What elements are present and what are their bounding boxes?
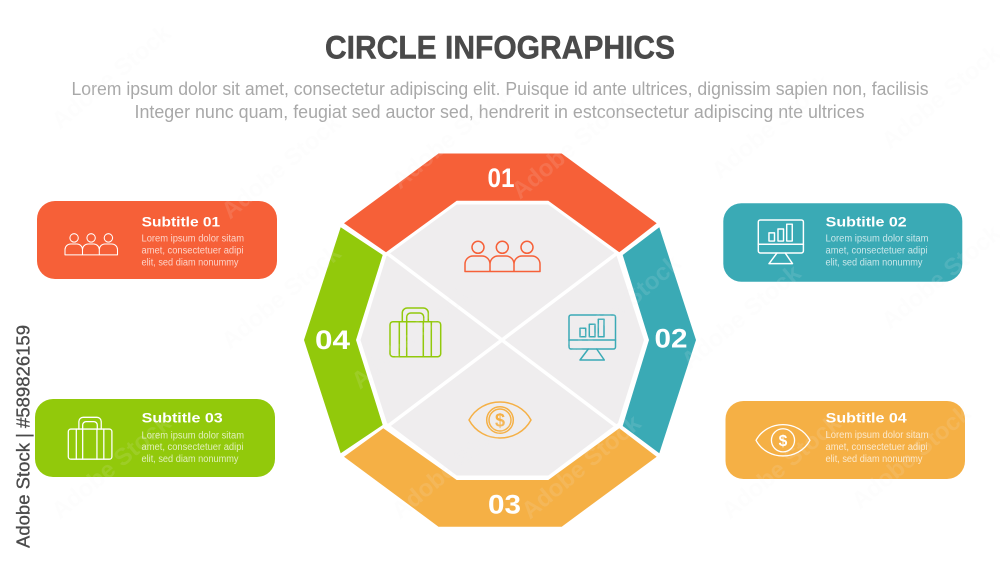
card text 03: Lorem ipsum dolor sitam — [142, 430, 244, 441]
segment 04: 04 — [315, 325, 350, 355]
card text 04: elit, sed diam nonummy — [826, 454, 922, 465]
stock watermarks: Adobe Stock — [677, 259, 807, 375]
stock watermarks: Adobe Stock — [847, 399, 977, 515]
icon: eye small: $ — [779, 433, 788, 450]
card: subtitle 01 — [37, 201, 277, 279]
icon: people — [465, 241, 540, 272]
segment 01 — [344, 154, 657, 252]
icon: eye with dollar — [469, 402, 531, 438]
title: CIRCLE INFOGRAPHICS — [325, 30, 675, 66]
card text 01: elit, sed diam nonummy — [142, 258, 238, 268]
stock watermarks: Adobe Stock — [507, 89, 637, 205]
stock id label: Adobe Stock | #589826159 — [14, 325, 34, 548]
stock watermarks: Adobe Stock — [217, 239, 347, 355]
card: subtitle 03 — [35, 399, 275, 477]
card text 02 — [826, 214, 928, 268]
card text 03 — [142, 411, 244, 465]
stock watermarks: Adobe Stock — [47, 19, 177, 135]
card text 02: amet, consectetuer adipi — [826, 246, 928, 256]
stock watermarks: Adobe Stock — [517, 409, 647, 525]
stock watermarks: Adobe Stock — [347, 279, 477, 395]
card text 03: elit, sed diam nonummy — [142, 454, 238, 465]
stock watermarks: Adobe Stock — [47, 409, 177, 525]
stock watermarks: Adobe Stock — [557, 249, 687, 365]
card: subtitle 02 — [723, 203, 962, 282]
card text 04: amet, consectetuer adipi — [826, 442, 928, 453]
center panel — [360, 204, 644, 476]
icon: eye with dollar: $ — [495, 410, 505, 430]
card text 03: amet, consectetuer adipi — [142, 442, 244, 453]
segment 03 — [344, 428, 657, 527]
card text 01 — [142, 214, 244, 268]
segment 02 — [623, 227, 696, 453]
card text 03: Subtitle 03 — [142, 411, 223, 426]
stock watermarks: Adobe Stock — [717, 409, 847, 525]
segment 04 — [304, 227, 383, 453]
stock watermarks: Adobe Stock — [707, 69, 837, 185]
icon: monitor — [569, 315, 616, 360]
card: subtitle 04 — [726, 401, 965, 479]
segment 02: 02 — [654, 324, 688, 354]
card text 02: Lorem ipsum dolor sitam — [826, 234, 928, 245]
card text 04: Subtitle 04 — [826, 411, 907, 426]
card text 02: Subtitle 02 — [826, 214, 907, 230]
icon: briefcase small — [68, 417, 112, 459]
icon: monitor small — [758, 220, 803, 264]
circle diagram — [304, 154, 696, 527]
intro text: Integer nunc quam, feugiat sed auctor sed, hendrerit in estconsectetur adipiscing nte ultrices — [134, 101, 864, 122]
stock watermarks: Adobe Stock — [387, 409, 517, 525]
card text 01: Subtitle 01 — [142, 214, 221, 230]
segment 01: 01 — [488, 163, 514, 193]
card text 04 — [826, 411, 928, 465]
card text 04: Lorem ipsum dolor sitam — [826, 430, 928, 441]
card text 02: elit, sed diam nonummy — [826, 258, 922, 268]
icon: people small — [65, 234, 117, 255]
card text 01: amet, consectetuer adipi — [142, 246, 244, 256]
card text 01: Lorem ipsum dolor sitam — [142, 234, 244, 245]
icon: briefcase — [390, 308, 441, 357]
intro text — [72, 78, 928, 122]
stock watermarks: Adobe Stock — [217, 109, 347, 225]
intro text: Lorem ipsum dolor sit amet, consectetur adipiscing elit. Puisque id ante ultrices, dignissim sapien non, facilisis — [72, 78, 928, 99]
stock watermarks: Adobe Stock — [387, 79, 517, 195]
icon: eye small — [756, 425, 810, 456]
segment 03: 03 — [488, 490, 521, 520]
